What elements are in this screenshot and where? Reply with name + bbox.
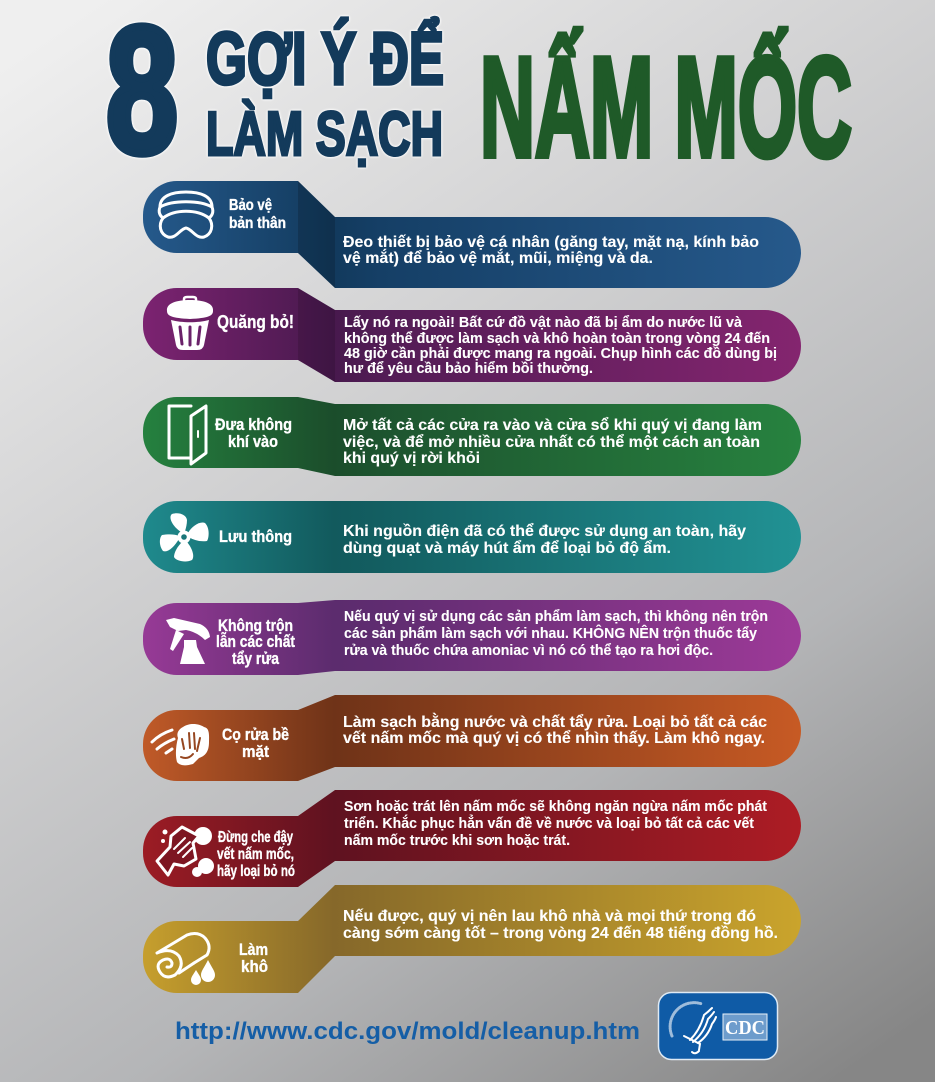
source url: http://www.cdc.gov/mold/cleanup.htm [175,1018,640,1045]
description: Đeo thiết bị bảo vệ cá nhân (găng tay, mặt nạ, kính bảo [343,234,759,251]
description: vết nấm mốc mà quý vị có thể nhìn thấy. Làm khô ngay. [343,730,765,747]
description [343,234,759,267]
label [217,829,295,880]
icon: hand wiping [152,724,209,765]
description: vệ mắt) để bảo vệ mắt, mũi, miệng và da. [343,249,653,267]
description [343,417,762,467]
description [343,908,778,942]
banner shape [143,397,801,476]
description: rửa và thuốc chứa amoniac vì nó có thể tạo ra hơi độc. [344,643,713,659]
label [229,197,286,232]
banner shape [143,501,801,573]
banner shape [143,181,801,288]
label: tẩy rửa [232,649,279,668]
banner shape [143,790,801,887]
label: Làm [239,940,268,959]
title line: Gợi ý để: GỢI Ý ĐỂ [206,17,444,100]
icon: open door [169,406,206,464]
description: Nếu được, quý vị nên lau khô nhà và mọi thứ trong đó [343,908,756,925]
label: vết nấm mốc, [217,846,294,863]
description: 48 giờ cần phải được mang ra ngoài. Chụp hình các đồ dùng bị [344,346,777,362]
label: Không trộn [218,616,293,635]
label: khí vào [228,432,278,451]
description: hư để yêu cầu bảo hiểm bồi thường. [344,361,593,377]
icon: HHS eagle [670,1003,716,1053]
label: hãy loại bỏ nó [217,863,295,880]
icon: fan [160,513,209,561]
description: Sơn hoặc trát lên nấm mốc sẽ không ngăn ngừa nấm mốc phát [344,799,767,815]
description: càng sớm càng tốt – trong vòng 24 đến 48 tiếng đồng hồ. [343,925,778,942]
description: dùng quạt và máy hút ẩm để loại bỏ độ ẩm. [343,540,671,557]
description: Lấy nó ra ngoài! Bất cứ đồ vật nào đã bị ẩm do nước lũ và [344,315,743,331]
panel: circulate [143,501,801,573]
logo badge [658,992,778,1060]
icon: rolled towel with drops [157,934,215,985]
panel: bring in air [143,397,801,476]
label: Đừng che đậy [218,829,293,846]
panel: do not mix cleaners [143,600,801,675]
label [239,940,268,976]
label [222,725,289,761]
label: mặt [242,742,269,761]
panel: scrub surfaces [143,695,801,781]
title [106,0,852,191]
description: Mở tất cả các cửa ra vào và cửa sổ khi quý vị đang làm [343,417,762,434]
panel: dry [143,885,801,993]
label: Đưa không [215,415,292,434]
description: việc, và để mở nhiều cửa nhất có thể một cách an toàn [343,434,760,451]
panel: do not cover mold [143,790,801,887]
label: lẫn các chất [216,632,295,651]
label [216,616,295,668]
logo: CDC box: CDC [725,1017,765,1039]
label: Lưu thông [219,527,292,546]
description [343,523,746,557]
description [344,609,768,659]
label: bản thân [229,215,286,232]
logo: HHS and CDC [658,992,778,1060]
description [344,799,767,849]
description: không thể được làm sạch và khô hoàn toàn trong vòng 24 đến [344,331,770,347]
label: Cọ rửa bề [222,725,289,744]
label: khô [241,957,268,976]
description: nấm mốc trước khi sơn hoặc trát. [344,833,570,849]
icon: hands cleaning with foam [157,827,214,877]
panel: protect yourself [143,181,801,288]
description: triển. Khắc phục hẳn vấn đề về nước và loại bỏ tất cả các vết [344,814,754,832]
label: Bảo vệ [229,197,272,214]
description: các sản phẩm làm sạch với nhau. KHÔNG NÊN trộn thuốc tẩy [344,624,757,642]
icon: goggles and helmet [159,192,213,237]
description: Nếu quý vị sử dụng các sản phẩm làm sạch, thì không nên trộn [344,609,768,625]
panel: throw away [143,288,801,382]
banner shape [143,288,801,382]
description: khi quý vị rời khỏi [343,450,480,467]
label: Quăng bỏ! [217,312,294,332]
title line: Làm sạch: LÀM SẠCH [206,100,443,169]
description [343,713,767,747]
banner shape [143,695,801,781]
icon: trash can [167,297,213,350]
description: Làm sạch bằng nước và chất tẩy rửa. Loại bỏ tất cả các [343,713,767,731]
banner shape [143,600,801,675]
banner shape [143,885,801,993]
description: Khi nguồn điện đã có thể được sử dụng an toàn, hãy [343,523,746,540]
icon: spray bottle [166,618,210,664]
description [344,315,777,377]
label [215,415,292,451]
